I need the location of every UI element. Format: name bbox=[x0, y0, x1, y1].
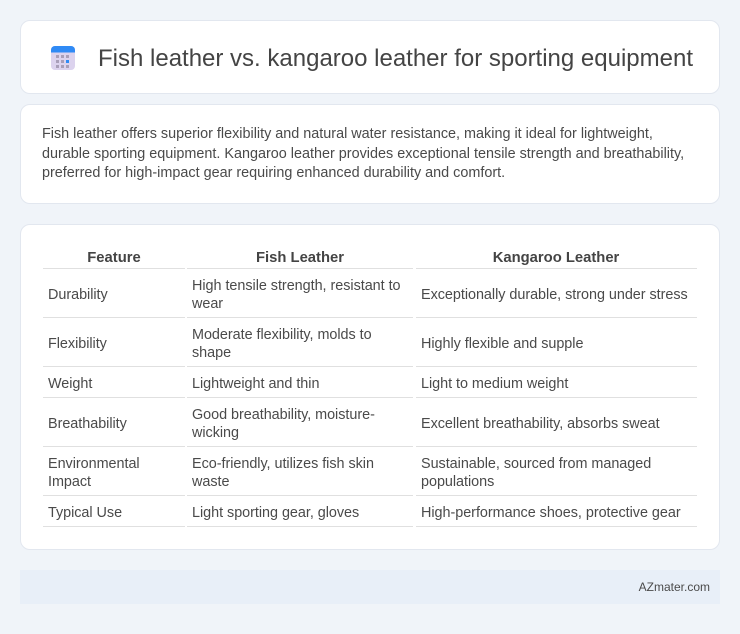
weight kangaroo: Light to medium weight bbox=[421, 376, 568, 392]
weight fish: Lightweight and thin bbox=[192, 376, 319, 392]
durability fish bbox=[192, 278, 401, 312]
row: Breathability: Breathability bbox=[48, 416, 127, 432]
breathability fish: Good breathability, moisture- bbox=[192, 407, 375, 423]
panel: summary card bbox=[20, 104, 720, 204]
environmental kangaroo bbox=[421, 456, 651, 490]
row: Environmental Impact bbox=[48, 456, 140, 490]
footer credit: AZmater.com bbox=[639, 580, 710, 594]
row: Environmental Impact: Environmental bbox=[48, 456, 140, 472]
environmental fish: waste bbox=[192, 474, 229, 490]
durability kangaroo: Exceptionally durable, strong under stress bbox=[421, 287, 688, 303]
summary text bbox=[42, 126, 684, 181]
durability fish: wear bbox=[192, 296, 223, 312]
breathability fish: wicking bbox=[192, 425, 239, 441]
environmental fish: Eco-friendly, utilizes fish skin bbox=[192, 456, 374, 472]
header: Fish Leather: Fish Leather bbox=[256, 250, 344, 266]
panel: comparison table card bbox=[20, 224, 720, 550]
breathability kangaroo: Excellent breathability, absorbs sweat bbox=[421, 416, 660, 432]
flexibility kangaroo: Highly flexible and supple bbox=[421, 336, 583, 352]
breathability fish bbox=[192, 407, 375, 441]
title: Fish leather vs. kangaroo leather for sporting equipment bbox=[98, 45, 693, 72]
row: Typical Use: Typical Use bbox=[48, 505, 122, 521]
flexibility fish: Moderate flexibility, molds to bbox=[192, 327, 372, 343]
summary text: preferred for high-impact gear requiring enhanced durability and comfort. bbox=[42, 165, 505, 181]
panel: title card bbox=[20, 20, 720, 94]
environmental kangaroo: Sustainable, sourced from managed bbox=[421, 456, 651, 472]
footer bar bbox=[20, 570, 720, 604]
flexibility fish: shape bbox=[192, 345, 231, 361]
row: Flexibility: Flexibility bbox=[48, 336, 107, 352]
flexibility fish bbox=[192, 327, 372, 361]
summary text: durable sporting equipment. Kangaroo leather provides exceptional tensile strength and breathability, bbox=[42, 146, 684, 162]
typical use fish: Light sporting gear, gloves bbox=[192, 505, 359, 521]
typical use kangaroo: High-performance shoes, protective gear bbox=[421, 505, 681, 521]
header: Kangaroo Leather: Kangaroo Leather bbox=[493, 250, 619, 266]
row: Weight: Weight bbox=[48, 376, 92, 392]
durability fish: High tensile strength, resistant to bbox=[192, 278, 401, 294]
environmental kangaroo: populations bbox=[421, 474, 494, 490]
icon: calendar bbox=[51, 46, 75, 70]
row: Durability: Durability bbox=[48, 287, 108, 303]
header: Feature: Feature bbox=[87, 250, 141, 266]
summary text: Fish leather offers superior flexibility and natural water resistance, making it ideal for lightweight, bbox=[42, 126, 653, 142]
row: Environmental Impact: Impact bbox=[48, 474, 91, 490]
environmental fish bbox=[192, 456, 374, 490]
